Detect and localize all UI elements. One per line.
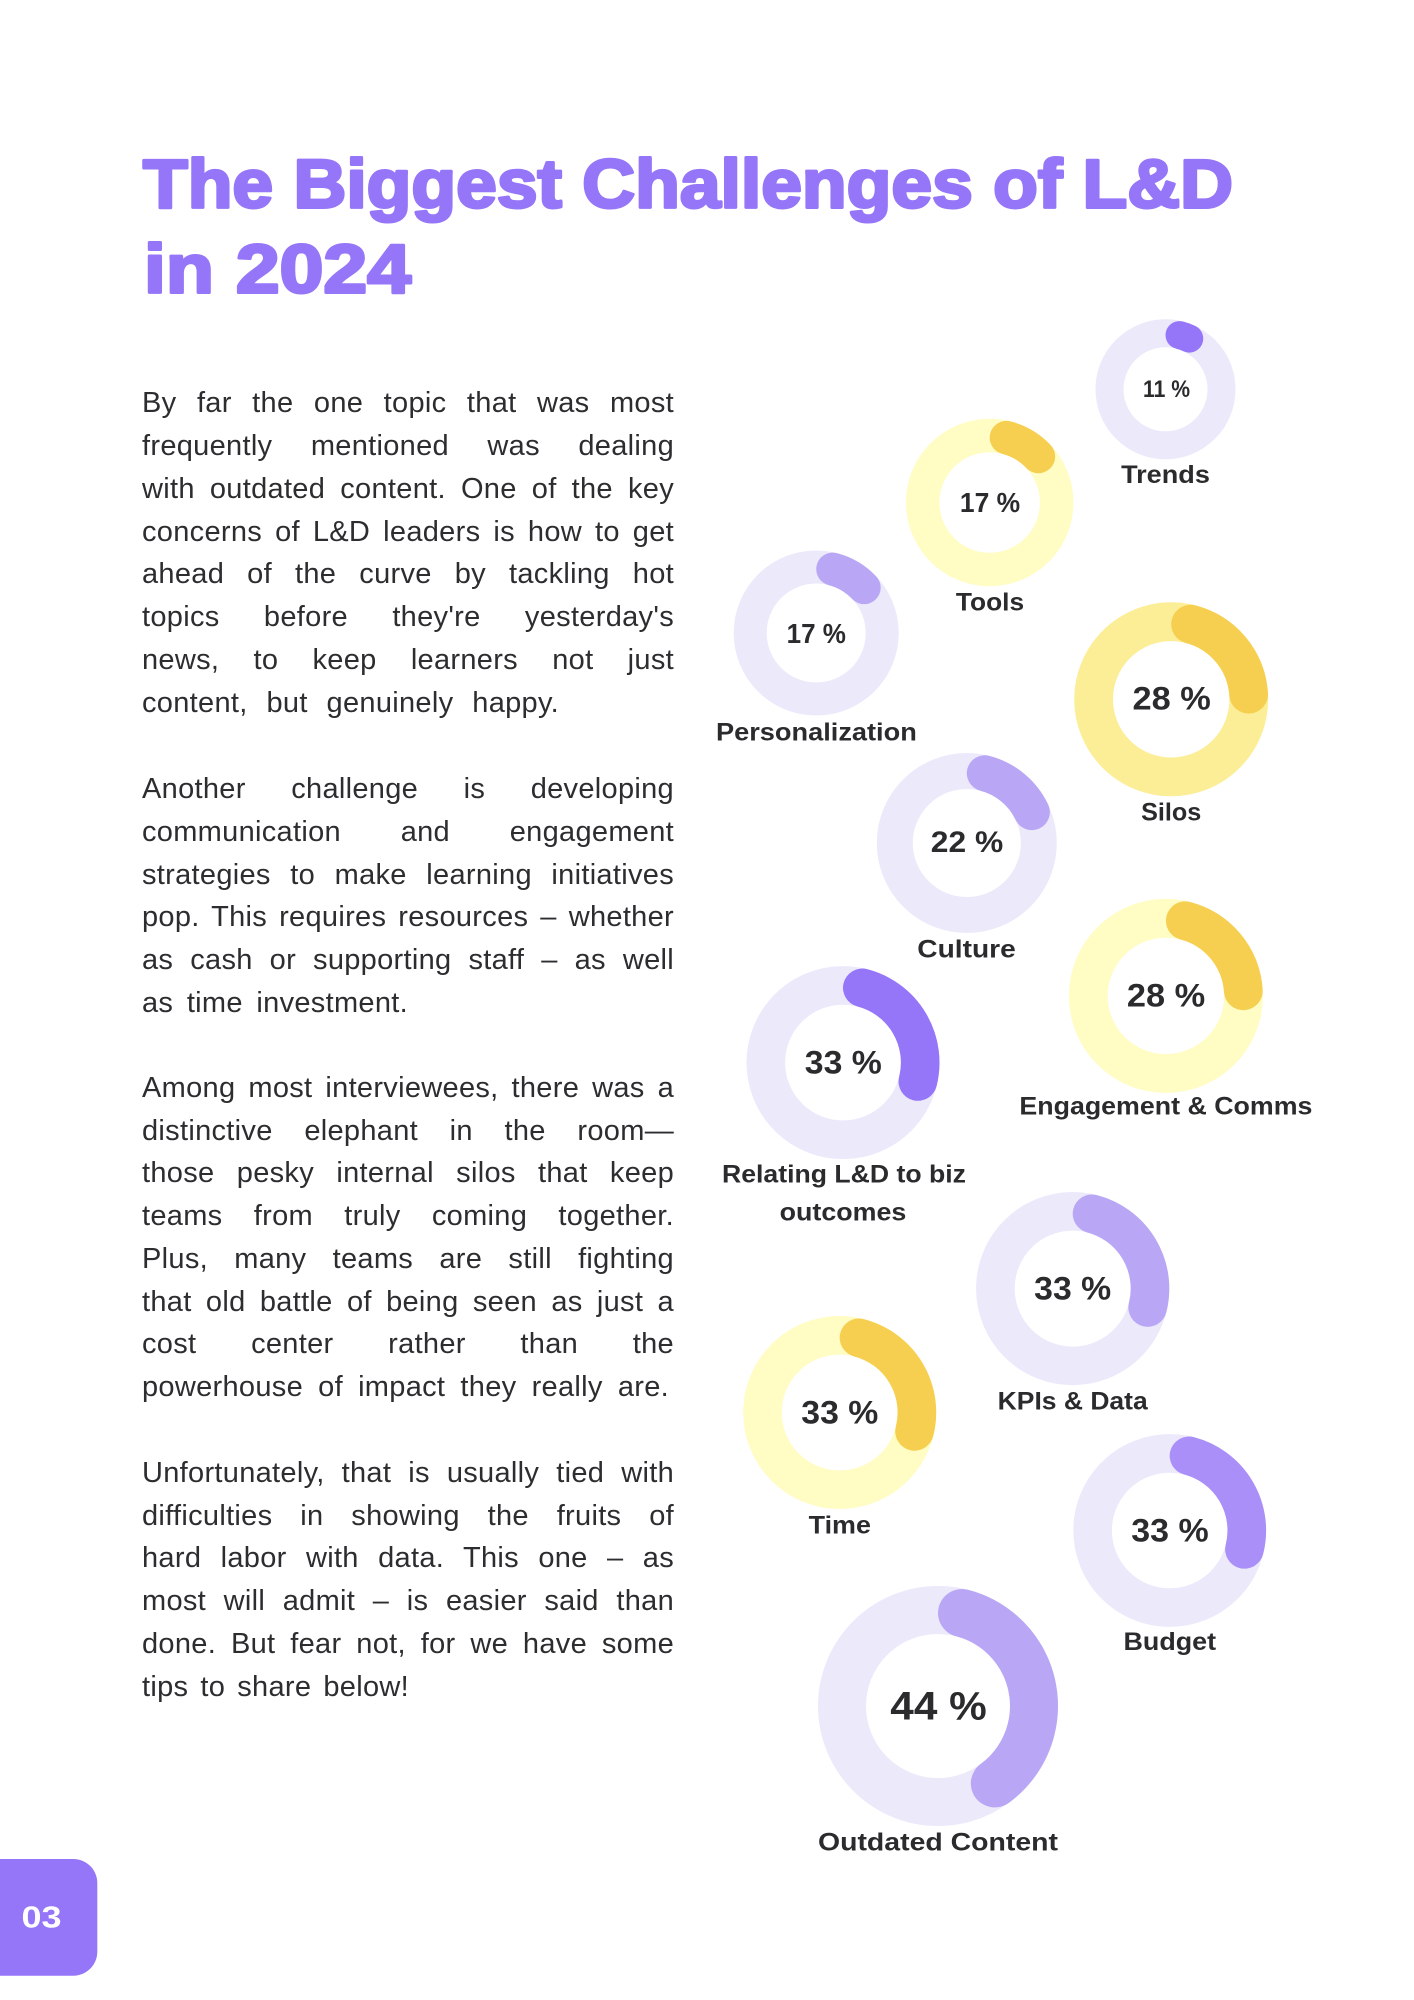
donut: Personalization 17%: Personalization: [716, 719, 917, 747]
donut: Silos 28%: [1077, 605, 1266, 827]
donut: KPIs & Data 33%: [979, 1194, 1167, 1415]
text block: paragraph 1: frequently mentioned was dealing: [142, 430, 674, 462]
text block: paragraph 1: By far the one topic that was most: [142, 387, 674, 419]
text block: paragraph 1: news, to keep learners not just: [142, 644, 674, 676]
donut: Engagement & Comms 28%: Engagement & Comms: [1019, 1092, 1312, 1120]
donut: Relating L&D to biz outcomes 33%: outcomes: [780, 1198, 906, 1226]
donut: Time 33%: 33 %: [801, 1394, 878, 1430]
page number tab: 03: [22, 1899, 62, 1934]
text block: paragraph 2: Another challenge is developing: [142, 773, 674, 805]
text block: paragraph 4: done. But fear not, for we have some: [142, 1628, 674, 1660]
donut: Personalization 17%: [716, 553, 917, 747]
text block: paragraph 3: teams from truly coming together.: [142, 1200, 674, 1232]
donut: Engagement & Comms 28%: [1019, 901, 1312, 1120]
text block: paragraph 2: pop. This requires resources – whether: [142, 901, 674, 933]
donut: Trends 11%: 11 %: [1143, 376, 1190, 403]
title: The Biggest Challenges of L&D: [143, 145, 1233, 222]
text block: paragraph 1: concerns of L&D leaders is how to get: [142, 516, 674, 548]
donut: Tools 17%: [908, 421, 1071, 617]
text block: paragraph 2: [142, 773, 674, 1019]
text block: paragraph 2: as cash or supporting staff – as well: [142, 944, 674, 976]
text block: paragraph 4: hard labor with data. This one – as: [142, 1542, 674, 1574]
text block: paragraph 2: as time investment.: [142, 987, 408, 1019]
donut: Silos 28%: Silos: [1141, 799, 1201, 827]
donut: Budget 33%: Budget: [1124, 1628, 1217, 1656]
text block: paragraph 4: most will admit – is easier said than: [142, 1585, 674, 1617]
text block: paragraph 3: that old battle of being seen as just a: [142, 1286, 674, 1318]
donut: Tools 17%: Tools: [956, 589, 1024, 617]
text block: paragraph 4: Unfortunately, that is usually tied with: [142, 1457, 674, 1489]
text block: paragraph 2: communication and engagement: [142, 816, 674, 848]
text block: paragraph 3: cost center rather than the: [142, 1328, 674, 1360]
donut: Relating L&D to biz outcomes 33%: 33 %: [805, 1045, 882, 1081]
text block: paragraph 3: Plus, many teams are still fighting: [142, 1243, 674, 1275]
text block: paragraph 3: those pesky internal silos that keep: [142, 1157, 674, 1189]
donut: Culture 22%: Culture: [917, 936, 1016, 964]
title: [143, 145, 1233, 308]
page number tab: [0, 1859, 97, 1976]
donut: KPIs & Data 33%: KPIs & Data: [998, 1387, 1149, 1415]
text block: paragraph 1: with outdated content. One of the key: [142, 473, 674, 505]
text block: paragraph 4: [142, 1457, 674, 1703]
donut: Engagement & Comms 28%: 28 %: [1127, 977, 1205, 1013]
text block: paragraph 4: difficulties in showing the fruits of: [142, 1500, 674, 1532]
donut: Relating L&D to biz outcomes 33%: [722, 969, 966, 1226]
text block: paragraph 3: distinctive elephant in the room—: [142, 1115, 674, 1147]
text block: paragraph 2: strategies to make learning initiatives: [142, 859, 674, 891]
donut: Outdated Content 44%: Outdated Content: [818, 1828, 1059, 1856]
donut: Silos 28%: 28 %: [1133, 680, 1211, 716]
text block: paragraph 1: topics before they're yesterday's: [142, 601, 674, 633]
donut: Culture 22%: 22 %: [931, 826, 1003, 859]
donut: KPIs & Data 33%: 33 %: [1034, 1270, 1111, 1306]
donut: Relating L&D to biz outcomes 33%: Relating L&D to biz: [722, 1160, 966, 1188]
donut: Budget 33%: [1076, 1437, 1264, 1656]
donut: Culture 22%: [879, 755, 1055, 964]
title: in 2024: [144, 231, 411, 308]
donut: Time 33%: Time: [809, 1511, 871, 1539]
donut: Trends 11%: Trends: [1121, 461, 1210, 489]
donut: Trends 11%: [1097, 321, 1234, 489]
text block: paragraph 3: powerhouse of impact they really are.: [142, 1371, 669, 1403]
text block: paragraph 3: [142, 1072, 674, 1403]
text block: paragraph 3: Among most interviewees, there was a: [142, 1072, 674, 1104]
text block: paragraph 1: ahead of the curve by tackling hot: [142, 558, 674, 590]
donut: Time 33%: [746, 1318, 934, 1539]
donut: Tools 17%: 17 %: [960, 487, 1020, 518]
donut: Outdated Content 44%: 44 %: [890, 1684, 987, 1728]
donut: Budget 33%: 33 %: [1131, 1513, 1209, 1549]
donut: Personalization 17%: 17 %: [787, 618, 846, 649]
donut: Outdated Content 44%: [818, 1589, 1059, 1856]
text block: paragraph 4: tips to share below!: [142, 1671, 409, 1703]
text block: paragraph 1: [142, 387, 674, 719]
text block: paragraph 1: content, but genuinely happy.: [142, 687, 559, 719]
